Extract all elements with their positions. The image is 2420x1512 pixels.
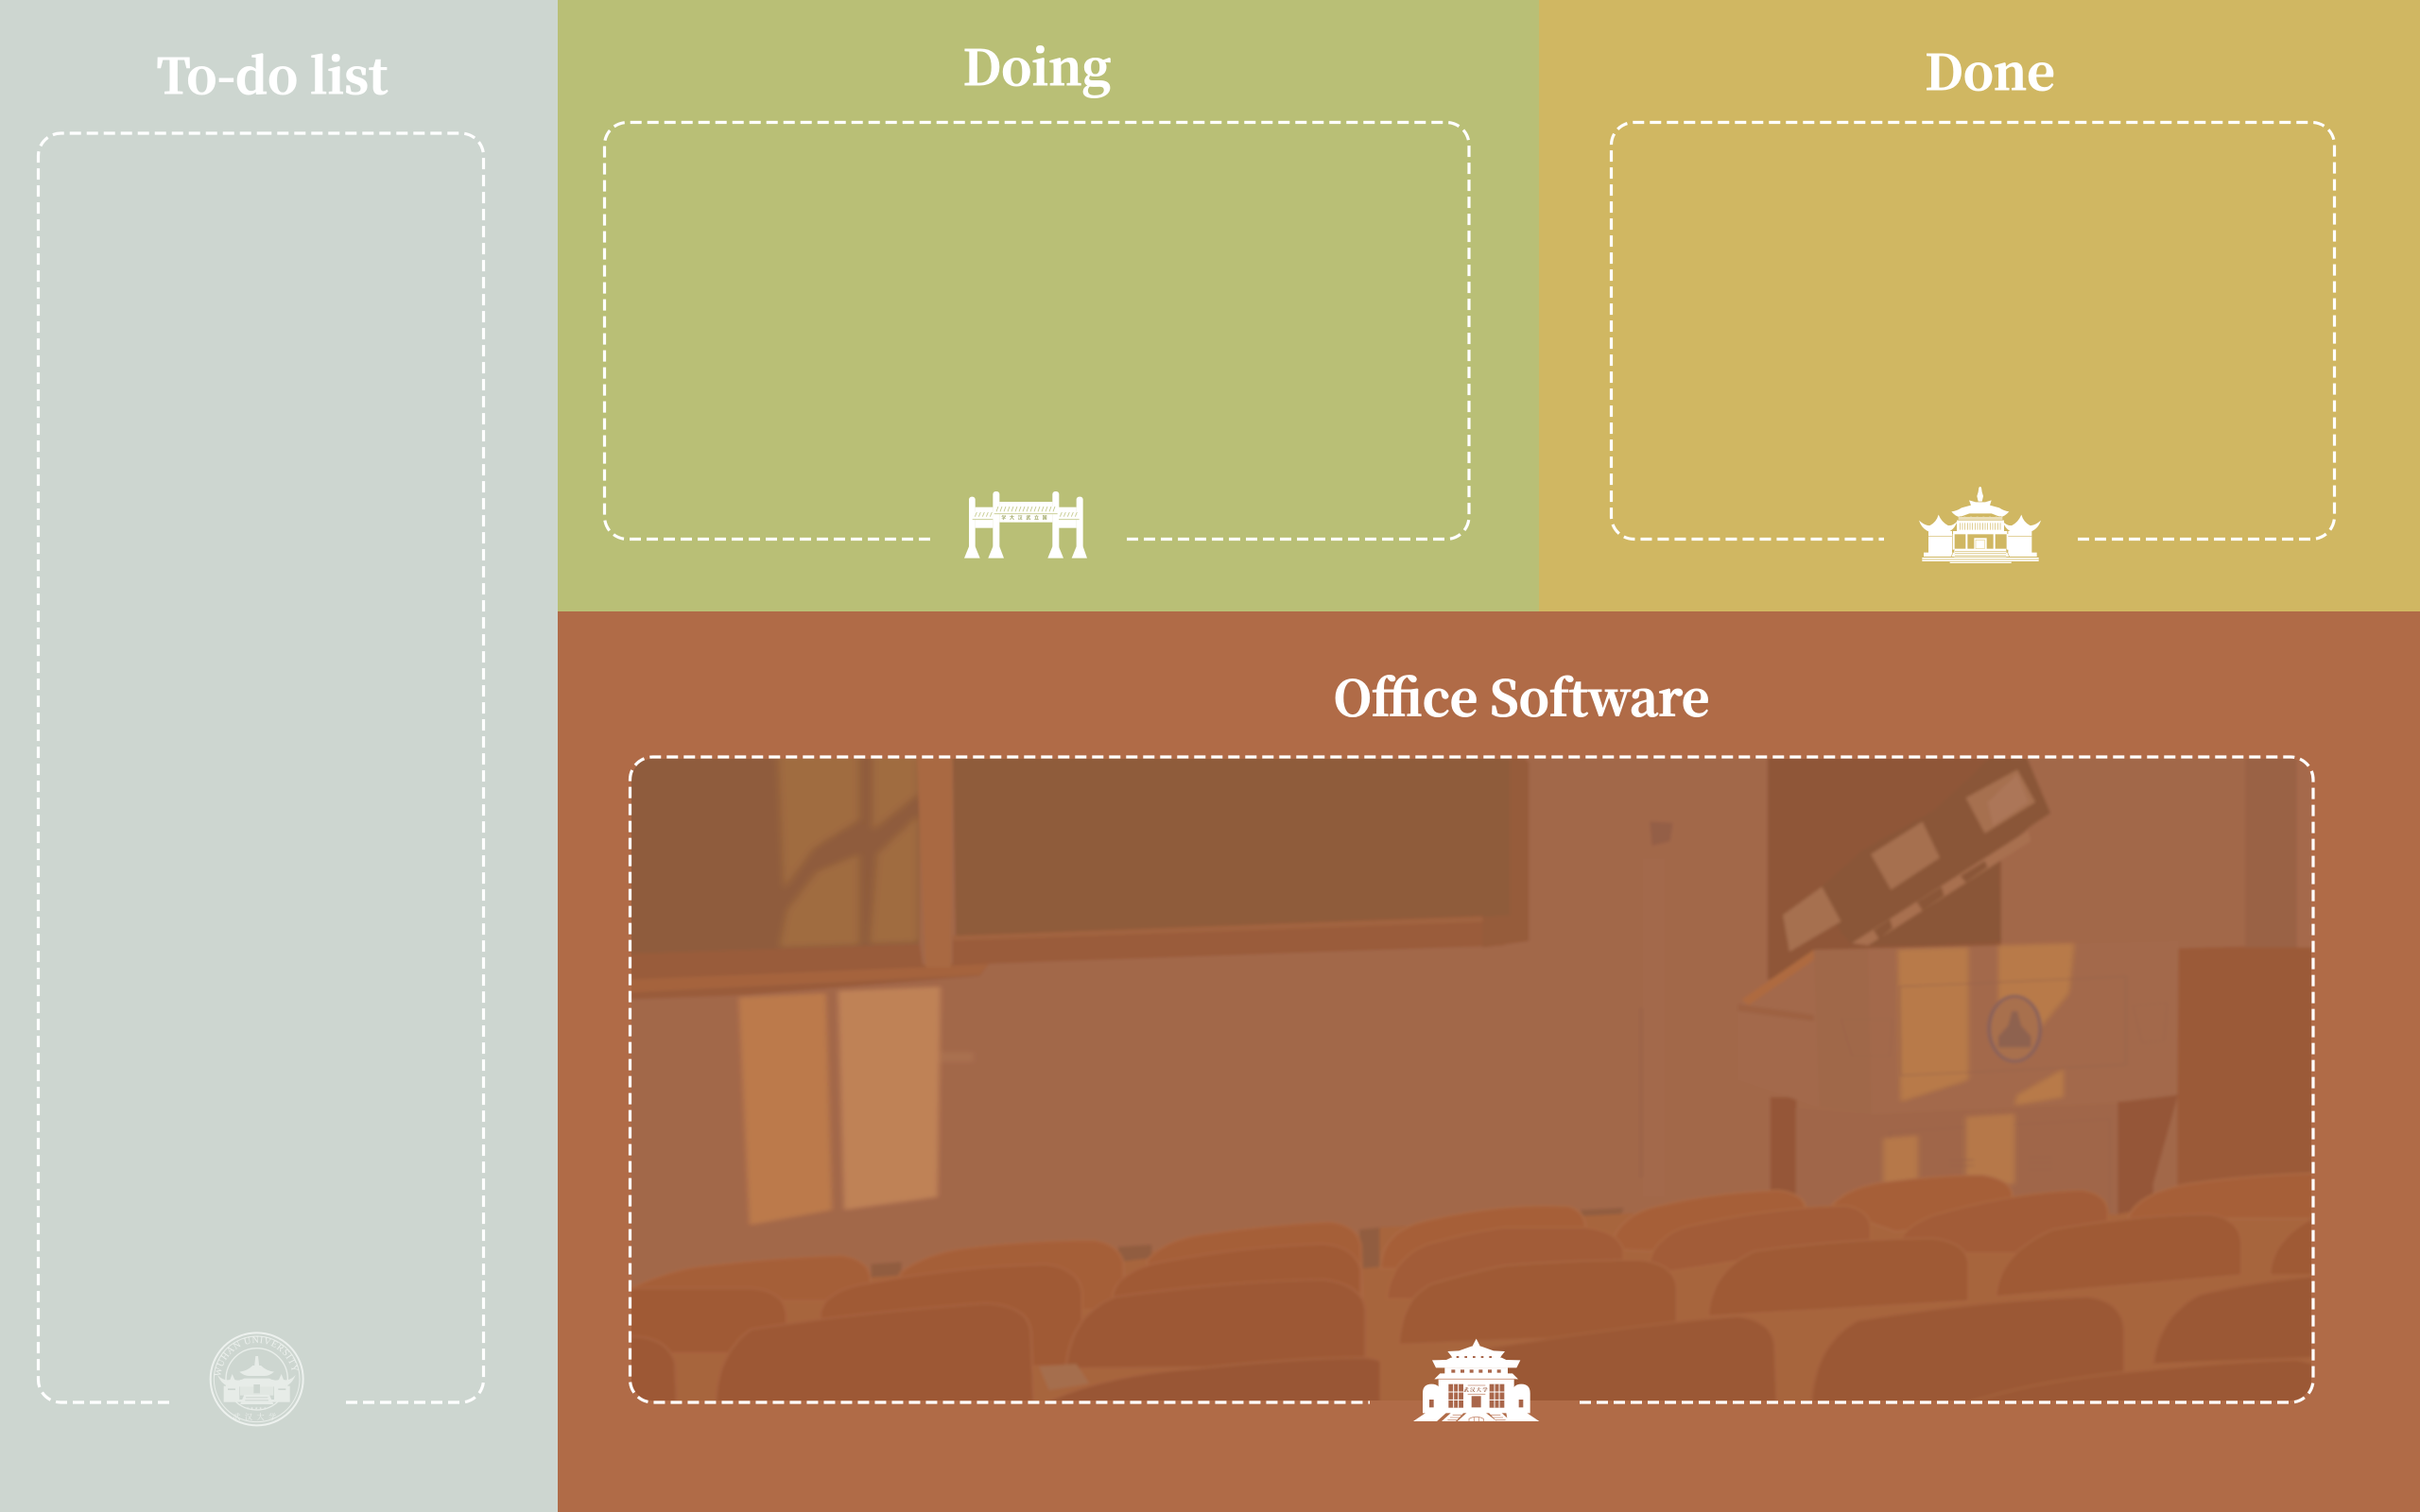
dashed box: office software (630, 757, 2313, 1402)
heading: Office Software: Office Software (1334, 660, 1709, 730)
closest row seats, right (1490, 1278, 2311, 1400)
left blackboard (618, 747, 989, 1000)
panel: to-do list (0, 0, 558, 1512)
back row seats, left (638, 1223, 1363, 1287)
icon: memorial archway: 学大汉武立国 (1001, 515, 1050, 522)
wall base (1582, 1208, 1622, 1215)
icon: university library (1413, 1339, 1539, 1421)
middle row seats, right (1387, 1191, 2108, 1301)
heading: To-do list: To-do list (157, 38, 389, 108)
dashed box: doing (605, 123, 1469, 539)
right blackboard (953, 747, 1504, 965)
right end of blackboard frame (1484, 759, 1529, 944)
front row seats, right (1399, 1212, 2325, 1345)
dark column behind podium (1768, 747, 2001, 980)
middle row seats, left (631, 1267, 1150, 1365)
lectern cabinet (1883, 1114, 2015, 1184)
far right panels (2177, 947, 2311, 1185)
panel: office software (628, 675, 2315, 1421)
panel: done (1539, 0, 2420, 611)
icon: university seal (210, 1332, 304, 1427)
projector bar (1783, 747, 2050, 952)
heading: Done: Done (1925, 34, 2055, 104)
icon: university seal: ★★★★★ (246, 1405, 268, 1410)
wall pipe (1651, 822, 1671, 845)
front row seats, left (631, 1301, 1379, 1400)
icon: university library: 武汉大学 (1463, 1386, 1489, 1394)
icon: memorial archway (964, 491, 1087, 558)
floor and baseboard, left (675, 1259, 1378, 1400)
floor, right (1379, 1212, 2311, 1400)
heading: Doing: Doing (963, 29, 1111, 99)
panel: doing (558, 0, 1539, 611)
lectern body (1737, 941, 2179, 1114)
icon: university seal: 武汉大学 (233, 1412, 281, 1421)
icon: university seal: WUHAN UNIVERSITY (215, 1336, 299, 1376)
photo: lecture hall with podium and seats (614, 747, 2325, 1418)
back row seats, right (1418, 1174, 2303, 1227)
icon: administration hall (1919, 487, 2041, 563)
dashed box: done (1611, 123, 2335, 539)
sunlight on wall (737, 986, 943, 1225)
dashed box: to-do (38, 133, 484, 1402)
desk note (1039, 1364, 1090, 1390)
